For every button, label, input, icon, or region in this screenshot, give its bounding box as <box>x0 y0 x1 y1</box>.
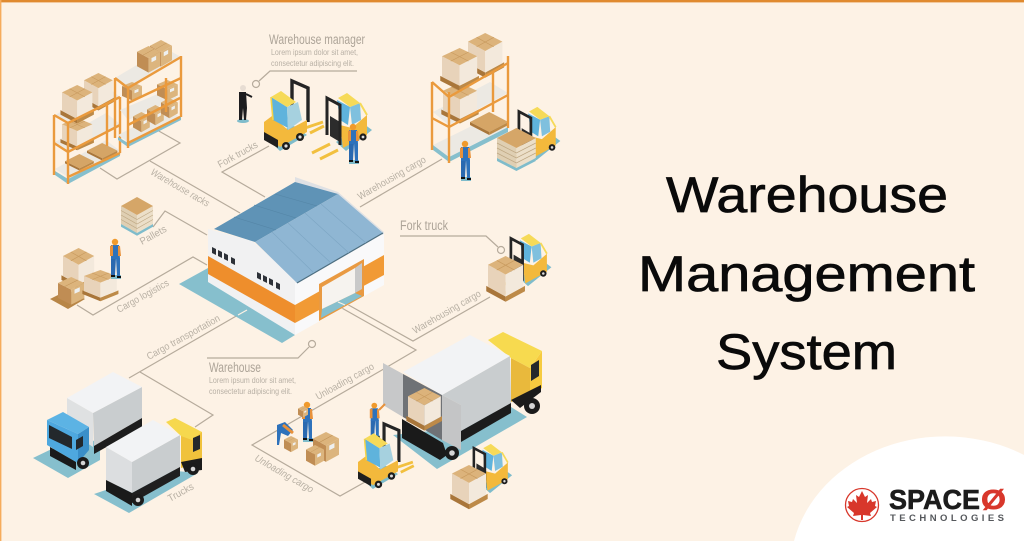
rack: lower left <box>54 73 120 184</box>
rotated connector labels: Pallets <box>138 224 169 248</box>
logo wordmark: Ø <box>981 484 1006 515</box>
logo wordmark: TECHNOLOGIES <box>890 513 1004 524</box>
callout: warehouse manager: Lorem ipsum dolor sit amet, <box>271 47 358 57</box>
callout: warehouse <box>209 360 296 396</box>
callout: warehouse: consectetur adipiscing elit. <box>209 386 292 396</box>
icon: maple leaf <box>846 488 878 522</box>
rotated connector labels: Warehouse racks <box>148 167 211 210</box>
icon: warehouse manager <box>237 85 252 123</box>
rotated connector labels: Cargo logistics <box>115 278 171 316</box>
unloading workers and boxes <box>277 402 385 466</box>
callout: warehouse: Warehouse <box>209 360 261 375</box>
truck: large unloading <box>383 332 542 469</box>
title: System <box>716 324 897 380</box>
logo wordmark: SPACE <box>889 484 980 515</box>
rotated connector labels: Fork trucks <box>216 140 260 171</box>
forklift group: fork trucks <box>237 81 372 164</box>
logo wordmark <box>889 484 1006 524</box>
forklift at truck <box>358 424 414 489</box>
callout: fork truck: Fork truck <box>400 218 448 233</box>
rotated connector labels: Unloading cargo <box>314 361 377 403</box>
rotated connector labels: Cargo transportation <box>145 313 222 363</box>
title: Management <box>638 246 975 302</box>
rack: upper right <box>432 33 508 163</box>
callout: warehouse manager <box>269 32 365 68</box>
logo panel <box>794 436 1024 541</box>
forklift with pallet box: bottom <box>450 444 512 509</box>
truck: blue <box>33 372 142 478</box>
callout: warehouse manager: consectetur adipiscing elit. <box>271 58 354 68</box>
rotated connector labels: Unloading cargo <box>252 453 316 496</box>
rotated connector labels: Trucks <box>166 481 196 505</box>
callout: warehouse: Lorem ipsum dolor sit amet, <box>209 375 296 385</box>
title <box>638 167 975 380</box>
forklift with pallet box: middle right <box>486 234 551 302</box>
truck: yellow <box>94 418 202 513</box>
rotated connector labels: Warehousing cargo <box>411 288 484 337</box>
rotated connector labels <box>115 140 484 505</box>
left border <box>0 0 1 541</box>
forklift with stacked pallet and worker <box>460 107 560 181</box>
title: Warehouse <box>666 167 948 223</box>
connector lines <box>77 71 504 496</box>
warehouse building <box>179 177 384 343</box>
callout: warehouse manager: Warehouse manager <box>269 32 365 47</box>
cargo logistics: boxes and worker <box>50 239 121 309</box>
pallet stack <box>121 197 153 236</box>
rack: upper left <box>115 40 181 148</box>
rotated connector labels: Warehousing cargo <box>356 154 429 203</box>
top border <box>0 0 1024 2</box>
